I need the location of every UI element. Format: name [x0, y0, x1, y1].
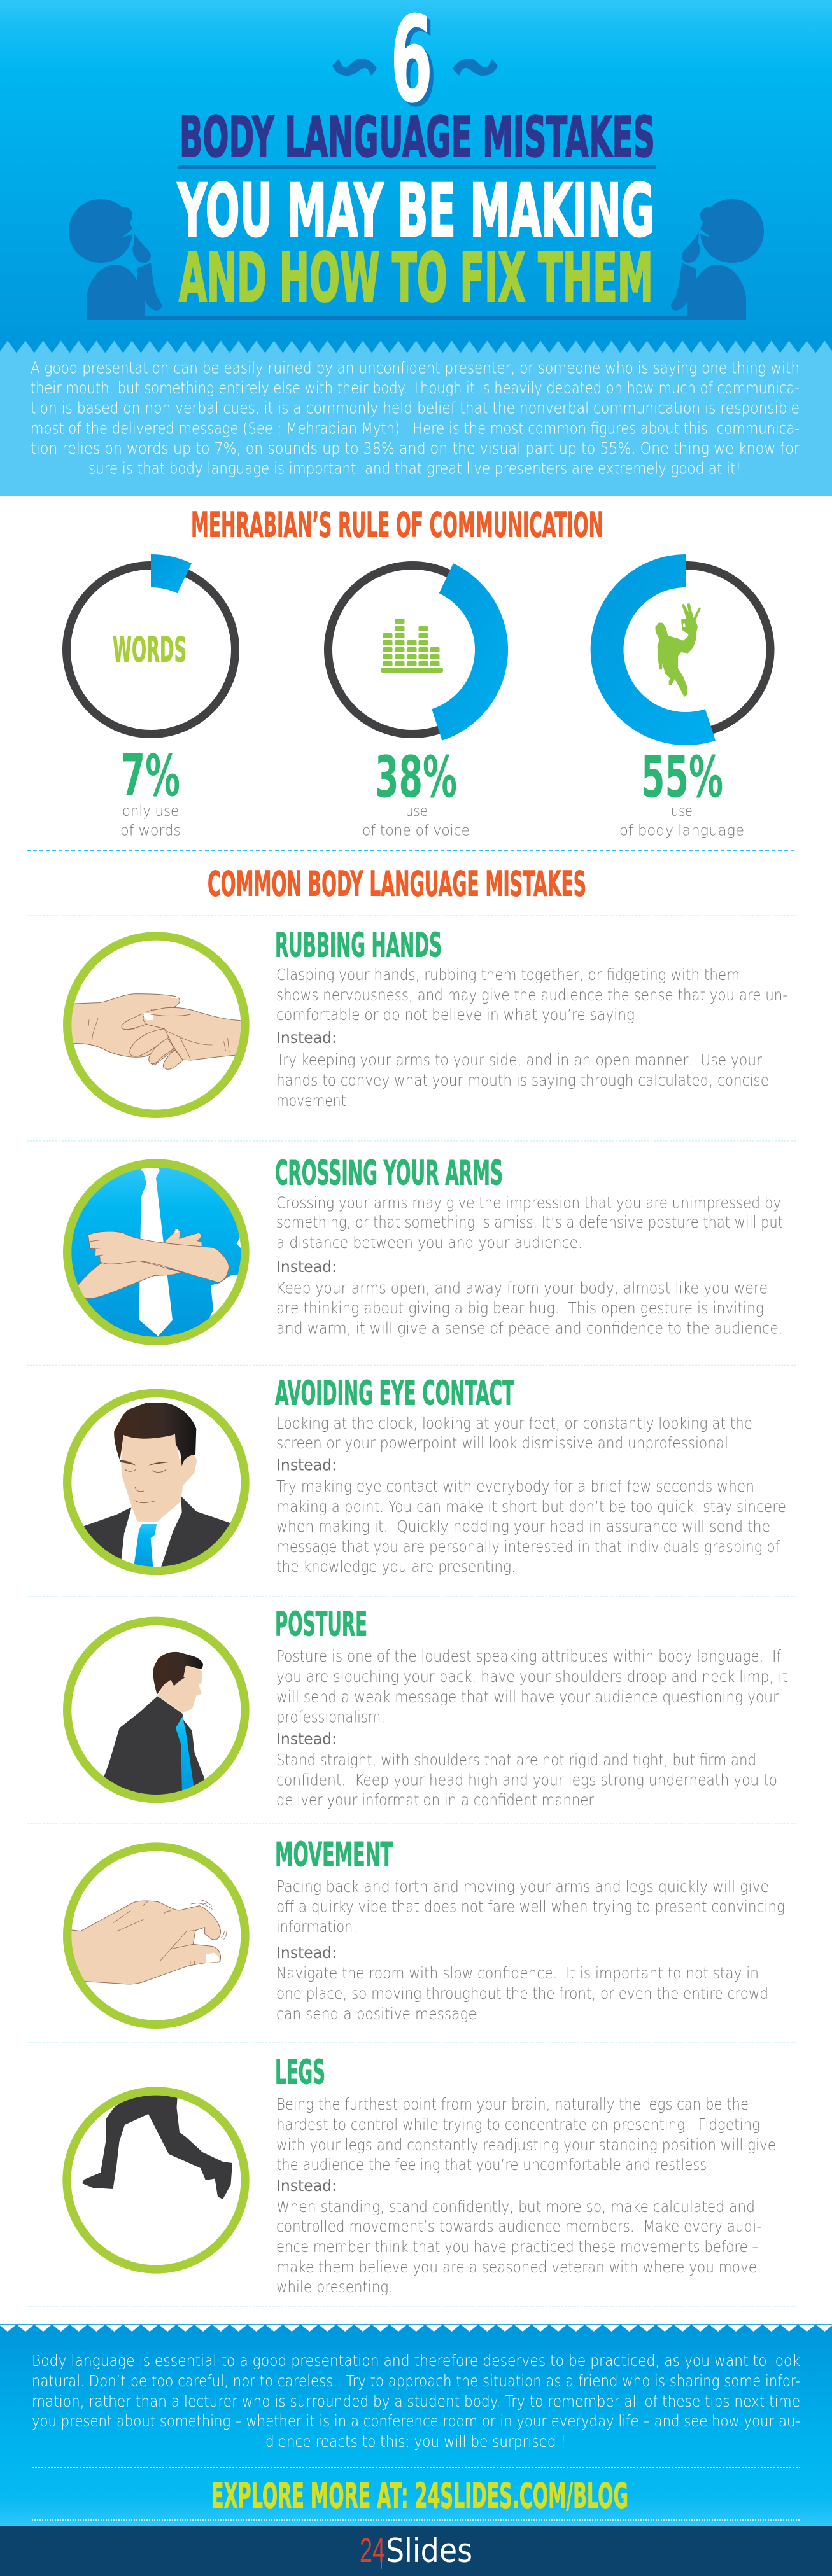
number: 7%: 7% — [121, 743, 180, 809]
fix description: when making it. Quickly nodding your head in assurance will send the — [276, 1517, 770, 1536]
header title block — [177, 0, 656, 317]
title rule — [178, 165, 656, 169]
fix description — [276, 1279, 783, 1338]
fix description: Navigate the room with slow confidence. It is important to not stay in — [276, 1964, 759, 1982]
fix description — [276, 1964, 768, 2023]
instead label: Instead: — [276, 1028, 337, 1047]
fix description — [276, 1751, 777, 1809]
panel: posture — [67, 1605, 787, 1809]
panel: crossing your arms — [67, 1154, 783, 1341]
icon: right figure — [642, 199, 764, 320]
instead label: Instead: — [276, 1257, 337, 1276]
fix description: make them believe you are a seasoned veteran with where you move — [276, 2258, 757, 2276]
panel: conclusion — [0, 2324, 832, 2526]
fix description: hands to convey what your mouth is saying through calculated, concise — [276, 1071, 769, 1089]
conclusion text: dience reacts to this: you will be surprised ! — [265, 2432, 566, 2451]
fix description: Try making eye contact with everybody for a brief few seconds when — [276, 1477, 754, 1495]
instead label: Instead: — [276, 2176, 337, 2195]
fix description — [276, 1477, 786, 1576]
fix description: movement. — [276, 1091, 350, 1110]
caption — [120, 803, 181, 839]
panel: introduction — [0, 341, 832, 496]
mistake description — [276, 1647, 787, 1726]
fix description: Stand straight, with shoulders that are not rigid and tight, but firm and — [276, 1751, 756, 1769]
mistake description: Pacing back and forth and moving your arms and legs quickly will give — [276, 1877, 769, 1896]
icon: crossed arms — [67, 1163, 245, 1341]
panel: legs — [67, 2053, 776, 2296]
icon: rubbing hands — [67, 936, 247, 1114]
mistake description: Looking at the clock, looking at your feet, or constantly looking at the — [276, 1414, 752, 1432]
chart: 7 percent words — [66, 554, 236, 839]
fix description — [276, 2197, 761, 2296]
chart: 55 percent body language — [591, 554, 770, 839]
logo: 24Slides: Slides — [386, 2532, 472, 2570]
icon: thinking figures with base bar — [69, 199, 764, 320]
chart: 38 percent tone of voice — [328, 563, 508, 839]
icon: dancer silhouette — [655, 603, 701, 697]
mistake description: a distance between you and your audience. — [276, 1233, 582, 1252]
mistake description — [276, 965, 787, 1024]
instead label: Instead: — [276, 1456, 337, 1474]
mistake description — [276, 1414, 752, 1452]
mistake description: Being the furthest point from your brain, naturally the legs can be the — [276, 2095, 749, 2113]
number: 38%: 38% — [375, 744, 457, 811]
mistake description: the audience the feeling that you’re uncomfortable and restless. — [276, 2155, 711, 2174]
fix description: and warm, it will give a sense of peace and confidence to the audience. — [276, 1319, 783, 1338]
heading: MOVEMENT — [275, 1835, 393, 1875]
caption — [362, 803, 470, 839]
fix description: deliver your information in a confident manner. — [276, 1791, 597, 1809]
mistake description: hardest to control while trying to concentrate on presenting. Fidgeting — [276, 2115, 760, 2134]
fix description: Try keeping your arms to your side, and in an open manner. Use your — [276, 1051, 763, 1069]
panel: avoiding eye contact — [67, 1375, 786, 1576]
fix description: the knowledge you are presenting. — [276, 1557, 516, 1576]
number: 55%: 55% — [641, 744, 723, 811]
caption: of body language — [619, 822, 744, 839]
instead label: Instead: — [276, 1730, 337, 1748]
icon: left figure — [69, 199, 191, 320]
fix description: can send a positive message. — [276, 2005, 481, 2023]
caption: use — [671, 803, 693, 820]
heading: AVOIDING EYE CONTACT — [275, 1375, 514, 1413]
caption: use — [405, 803, 428, 820]
mistake description — [276, 1877, 785, 1936]
icon: running legs — [67, 2091, 245, 2269]
fix description: Keep your arms open, and away from your body, almost like you were — [276, 1279, 768, 1297]
fix description — [276, 1051, 769, 1110]
footer band — [0, 2526, 832, 2576]
intro text — [31, 359, 800, 477]
heading: LEGS — [275, 2053, 325, 2092]
mistake description: professionalism. — [276, 1708, 385, 1726]
mistake description — [276, 1194, 783, 1252]
mistake description: information. — [276, 1917, 357, 1936]
fix description: while presenting. — [276, 2278, 393, 2296]
mistake description: comfortable or do not believe in what you’re saying. — [276, 1005, 639, 1024]
fix description: controlled movement’s towards audience members. Make every audi- — [276, 2217, 761, 2236]
caption: of words — [120, 822, 181, 839]
instead label: Instead: — [276, 1943, 337, 1962]
panel: rubbing hands — [67, 927, 787, 1114]
mistake description — [276, 2095, 776, 2174]
intro text: sure is that body language is important, and that great live presenters are extremely good at it! — [88, 459, 741, 477]
fix description: When standing, stand confidently, but more so, make calculated and — [276, 2197, 755, 2216]
icon: left tilde — [332, 59, 377, 76]
mistake description: Clasping your hands, rubbing them together, or fidgeting with them — [276, 965, 740, 984]
caption — [619, 803, 744, 839]
heading: CROSSING YOUR ARMS — [275, 1154, 503, 1193]
icon: right tilde — [453, 59, 498, 76]
icon: fidgeting hand — [67, 1847, 245, 2024]
heading: POSTURE — [275, 1605, 367, 1644]
caption: only use — [122, 803, 179, 820]
mistake description: screen or your powerpoint will look dismissive and unprofessional — [276, 1434, 728, 1452]
icon: man looking down — [67, 1393, 245, 1574]
caption: of tone of voice — [362, 822, 470, 839]
fix description: are thinking about giving a big bear hug. This open gesture is inviting — [276, 1299, 764, 1317]
icon: slouching man — [67, 1621, 245, 1802]
panel: movement — [67, 1835, 785, 2024]
logo: 24Slides — [360, 2531, 472, 2570]
logo: 24Slides: 24 — [360, 2531, 385, 2570]
conclusion text — [32, 2351, 800, 2451]
big number six — [390, 0, 437, 134]
heading: RUBBING HANDS — [275, 927, 442, 965]
header background — [0, 0, 832, 354]
label: words: WORDS — [113, 630, 187, 669]
icon: equalizer — [381, 619, 443, 673]
fix description: ence member think that you have practiced these movements before – — [276, 2237, 759, 2256]
